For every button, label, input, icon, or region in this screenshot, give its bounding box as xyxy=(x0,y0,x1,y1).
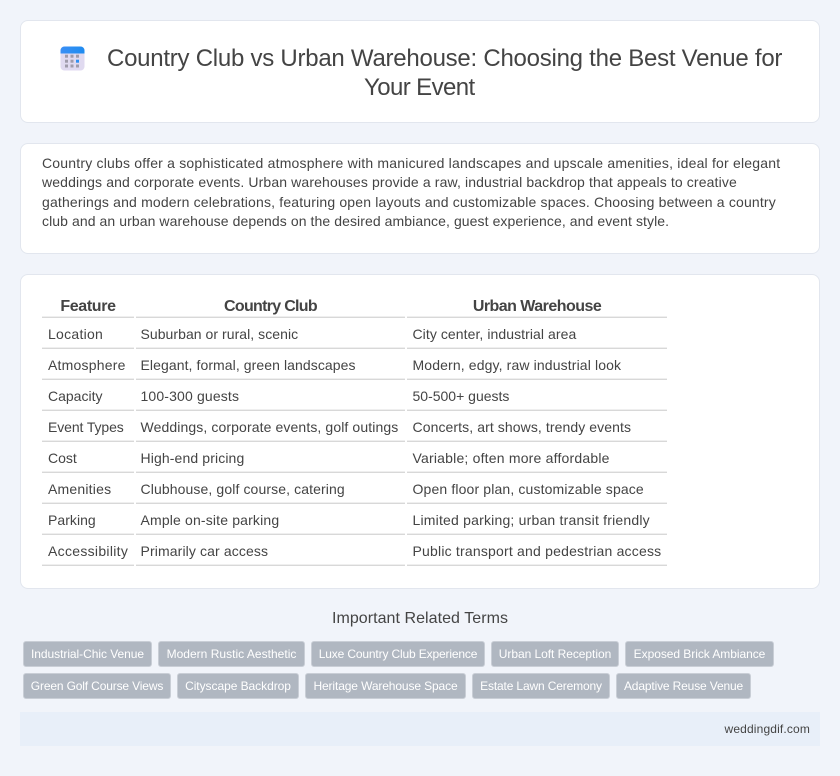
related term tags: Modern Rustic Aesthetic xyxy=(167,647,296,661)
row: location: Location xyxy=(48,326,103,342)
text block: description xyxy=(42,155,780,229)
heading: important related terms: Important Related Terms xyxy=(332,610,508,627)
table rows xyxy=(42,316,667,566)
related term tags: Green Golf Course Views xyxy=(31,679,163,693)
row: event types: Concerts, art shows, trendy events xyxy=(412,419,631,435)
row: amenities xyxy=(42,471,667,497)
text block: description: weddings and corporate events. Urban warehouses provide a raw, industrial backdrop that appeals to creative xyxy=(42,174,737,190)
row: event types: Event Types xyxy=(48,419,124,435)
row: parking: Limited parking; urban transit friendly xyxy=(412,512,650,528)
related term tags: Estate Lawn Ceremony xyxy=(480,679,602,693)
row: accessibility: Accessibility xyxy=(48,543,128,559)
related term tags: Urban Loft Reception xyxy=(499,647,611,661)
title xyxy=(107,45,782,101)
related term tags: Exposed Brick Ambiance xyxy=(634,647,765,661)
row: capacity: 100-300 guests xyxy=(140,388,239,404)
text block: description: club and an urban warehouse depends on the desired ambiance, guest experience, and event style. xyxy=(42,213,669,229)
related term tags: Cityscape Backdrop xyxy=(185,679,291,693)
table header: Feature xyxy=(60,298,116,315)
row: capacity: Capacity xyxy=(48,388,102,404)
text block: description: gatherings and modern celebrations, featuring open layouts and customizable spaces. Choosing between a country xyxy=(42,194,776,210)
table header xyxy=(60,298,602,315)
panel: comparison table xyxy=(20,274,820,589)
row: location: Suburban or rural, scenic xyxy=(140,326,298,342)
related term tags: Adaptive Reuse Venue xyxy=(624,679,743,693)
row: event types: Weddings, corporate events, golf outings xyxy=(140,419,398,435)
related term tags: Heritage Warehouse Space xyxy=(313,679,458,693)
row: location: City center, industrial area xyxy=(412,326,576,342)
row: atmosphere: Elegant, formal, green landscapes xyxy=(140,357,356,373)
table header: Country Club xyxy=(224,298,317,315)
related term tags: Industrial-Chic Venue xyxy=(31,647,144,661)
related term tags: Luxe Country Club Experience xyxy=(319,647,477,661)
row: cost: Variable; often more affordable xyxy=(412,450,610,466)
row: cost xyxy=(42,440,667,466)
row: accessibility xyxy=(42,533,667,559)
row: capacity xyxy=(42,378,667,404)
row: parking: Parking xyxy=(48,512,96,528)
row: amenities: Clubhouse, golf course, catering xyxy=(140,481,345,497)
related term tags xyxy=(23,641,774,699)
row: accessibility: Public transport and pedestrian access xyxy=(412,543,661,559)
footer xyxy=(20,712,820,746)
row: parking: Ample on-site parking xyxy=(140,512,279,528)
row: atmosphere: Atmosphere xyxy=(48,357,126,373)
row: atmosphere xyxy=(42,347,667,373)
row: event types xyxy=(42,409,667,435)
footer source text: weddingdif.com xyxy=(725,722,810,736)
panel: description xyxy=(20,143,820,254)
row: cost: High-end pricing xyxy=(140,450,244,466)
row: cost: Cost xyxy=(48,450,77,466)
panel: header xyxy=(20,20,820,123)
row: parking xyxy=(42,502,667,528)
row: capacity: 50-500+ guests xyxy=(412,388,509,404)
table header: Urban Warehouse xyxy=(473,298,601,315)
title: Your Event xyxy=(364,74,475,101)
row: amenities: Amenities xyxy=(48,481,111,497)
row: location xyxy=(42,316,667,342)
icon: calendar xyxy=(60,46,84,70)
title: Country Club vs Urban Warehouse: Choosing the Best Venue for xyxy=(107,45,782,72)
row: accessibility: Primarily car access xyxy=(140,543,268,559)
row: amenities: Open floor plan, customizable space xyxy=(412,481,644,497)
text block: description: Country clubs offer a sophisticated atmosphere with manicured landscapes and upscale amenities, ideal for elegant xyxy=(42,155,780,171)
row: atmosphere: Modern, edgy, raw industrial look xyxy=(412,357,621,373)
